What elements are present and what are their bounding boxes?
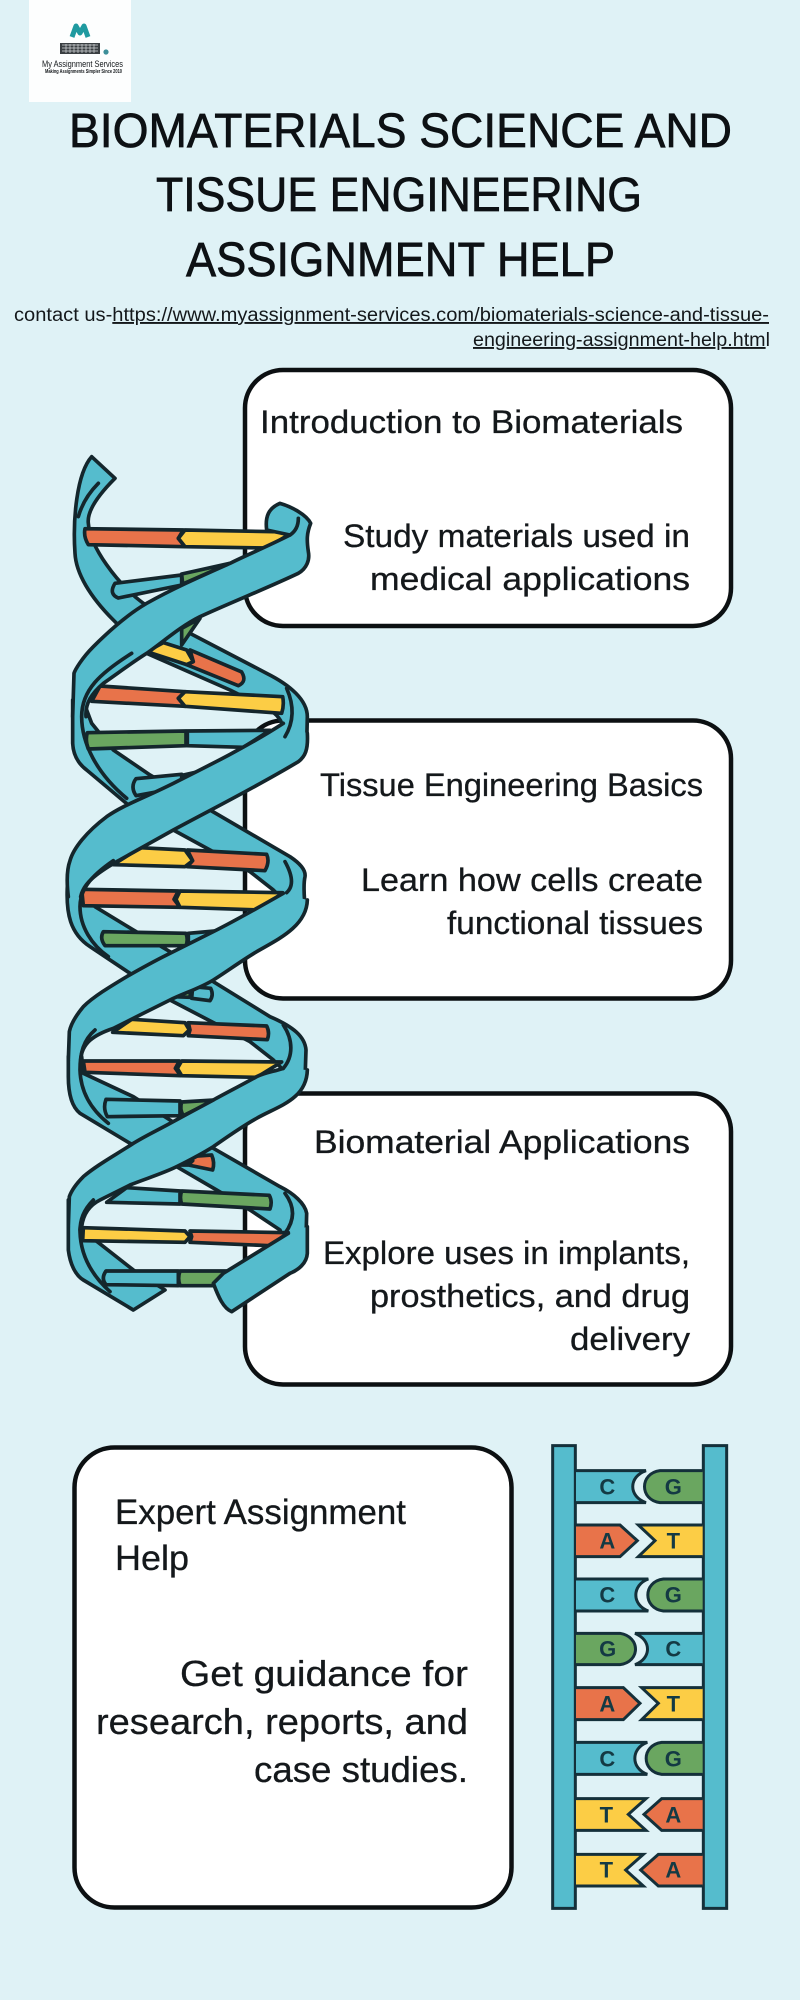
base pair A-T: T [667, 1529, 681, 1554]
text: biomaterial applications [314, 1124, 690, 1357]
logo: My Assignment Services [29, 0, 131, 102]
title: ASSIGNMENT HELP [186, 234, 615, 287]
text: biomaterial applications: Biomaterial Applications [314, 1124, 690, 1160]
text: tissue engineering basics: Learn how cells create [361, 862, 703, 898]
contact link: engineering-assignment-help.htm l [473, 330, 770, 351]
panel: introduction to biomaterials [245, 370, 731, 626]
base pair C-G: C [599, 1747, 615, 1772]
base pair G-C: G [599, 1637, 616, 1662]
base pair rungs [82, 529, 293, 1286]
text: tissue engineering basics [320, 767, 703, 941]
text: tissue engineering basics: functional tissues [447, 905, 703, 941]
contact link: contact us- https://www.myassignment-services.com/biomaterials-science-and-tissue- [14, 305, 769, 326]
title: BIOMATERIALS SCIENCE AND [69, 105, 732, 158]
base pair C-G: G [665, 1583, 682, 1608]
base pair A-T: A [599, 1692, 615, 1717]
base pair C-G [576, 1579, 703, 1611]
panel: biomaterial applications [245, 1094, 731, 1384]
helix back strands [67, 457, 307, 1310]
base pair G-C [576, 1633, 703, 1665]
base pair T-A: T [600, 1803, 614, 1828]
text: biomaterial applications: delivery [570, 1321, 690, 1357]
base pair C-G: C [599, 1583, 615, 1608]
text: introduction to biomaterials: Study materials used in [343, 518, 690, 554]
icon: DNA ladder with base pairs [553, 1446, 727, 1908]
base pair C-G [576, 1742, 703, 1774]
panel: expert assignment help [74, 1448, 512, 1908]
text: introduction to biomaterials: medical applications [370, 561, 690, 597]
left rail [553, 1446, 575, 1908]
text: expert assignment help: Expert Assignment [115, 1493, 406, 1532]
base pair C-G: G [665, 1747, 682, 1772]
text: expert assignment help [96, 1493, 468, 1790]
base pair T-A: A [665, 1803, 681, 1828]
helix fold lines [78, 483, 298, 1292]
panel: tissue engineering basics [245, 720, 731, 998]
base pair T-A: T [600, 1857, 614, 1882]
base pair C-G [576, 1471, 703, 1503]
base pair T-A [576, 1799, 703, 1830]
base pair T-A [576, 1854, 703, 1886]
text: expert assignment help: research, reports, and [96, 1701, 468, 1742]
base pair T-A: A [665, 1857, 681, 1882]
base pair C-G: G [665, 1474, 682, 1499]
base pair A-T [576, 1688, 703, 1720]
logo: My Assignment Services: Making Assignments Simpler Since 2010 [45, 69, 122, 75]
text: biomaterial applications: Explore uses in implants, [323, 1235, 690, 1271]
text: expert assignment help: Help [115, 1539, 189, 1578]
text: biomaterial applications: prosthetics, and drug [370, 1278, 690, 1314]
text: expert assignment help: case studies. [254, 1749, 468, 1790]
title [69, 105, 732, 287]
base pair G-C: C [665, 1637, 681, 1662]
text: introduction to biomaterials: Introduction to Biomaterials [260, 404, 683, 440]
base pair A-T [576, 1525, 703, 1557]
helix front strands [67, 503, 311, 1312]
text: expert assignment help: Get guidance for [180, 1653, 468, 1694]
right rail [703, 1446, 727, 1908]
text: tissue engineering basics: Tissue Engineering Basics [320, 767, 703, 803]
logo: My Assignment Services: My Assignment Services [42, 59, 123, 69]
title: TISSUE ENGINEERING [156, 169, 642, 222]
contact link [14, 305, 770, 351]
base pair C-G: C [599, 1474, 615, 1499]
text: introduction to biomaterials [260, 404, 690, 597]
icon: DNA double helix [67, 457, 311, 1312]
base pair A-T: T [667, 1692, 681, 1717]
base pair A-T: A [599, 1529, 615, 1554]
